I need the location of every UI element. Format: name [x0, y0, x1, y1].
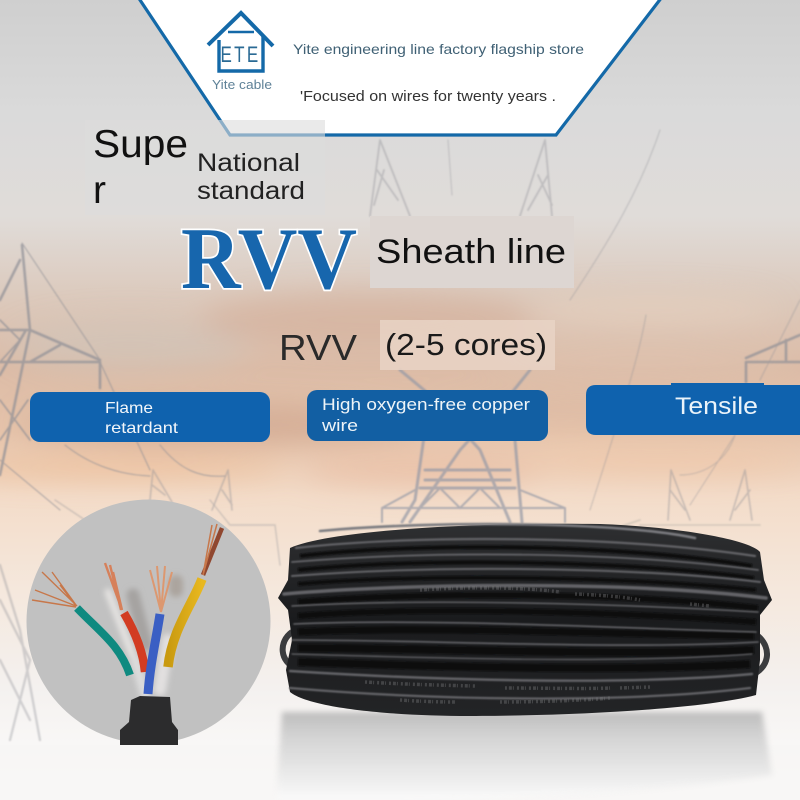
wire: yellow	[168, 579, 202, 667]
heading: Super National standard: Supe	[93, 123, 188, 166]
coil strand shadows	[298, 547, 758, 668]
cable sheath	[120, 696, 178, 745]
heading: Super National standard: National	[197, 149, 300, 177]
coil printed marks	[365, 588, 710, 702]
heading: Sheath line: Sheath line	[376, 233, 566, 271]
wire: blue	[148, 614, 160, 694]
badge: tensile: Tensile	[675, 393, 758, 420]
heading: Sheath line	[370, 216, 574, 288]
subheading: 2-5 cores: (2-5 cores)	[385, 327, 547, 362]
pylon: top centre	[370, 140, 552, 216]
heading: RVV large logo text: RVV	[181, 211, 357, 308]
logo caption: Yite cable	[212, 78, 272, 92]
badge: high oxygen-free copper wire: wire	[321, 416, 358, 435]
pylon: centre behind wire badge	[382, 370, 565, 522]
heading: Super National standard: r	[93, 169, 106, 212]
coil loose loop ends	[283, 632, 767, 676]
heading: Super National standard	[85, 120, 325, 215]
badge: flame retardant: Flame	[105, 400, 153, 417]
slogan: 'Focused on wires for twenty years .	[300, 89, 556, 105]
coil strand highlights	[284, 524, 766, 699]
coil body	[278, 524, 772, 716]
badge: flame retardant: retardant	[105, 420, 179, 437]
coil reflection	[276, 712, 772, 800]
icon: house logo	[208, 13, 273, 71]
photo: stripped five-core cable in circle	[26, 500, 270, 745]
badge: high oxygen-free copper wire: High oxygen-free copper	[322, 395, 530, 414]
badge: high oxygen-free copper wire	[307, 390, 548, 441]
subheading: RVV: RVV	[279, 327, 357, 368]
subheading: 2-5 cores	[380, 320, 555, 370]
heading: Super National standard: standard	[197, 177, 305, 205]
store name: Yite engineering line factory flagship store	[293, 41, 584, 57]
header plate	[138, 0, 662, 135]
power pylons in background	[0, 130, 800, 740]
badge: flame retardant	[30, 392, 270, 442]
wire: teal	[77, 608, 130, 675]
badge: tensile	[586, 383, 800, 435]
pylon: right	[570, 130, 800, 510]
white and grey wire ghosts	[108, 582, 176, 695]
photo: black cable coil	[276, 524, 772, 800]
icon: house logo: ETE	[220, 42, 260, 67]
pylon: lower left	[0, 500, 280, 740]
fade to white at the bottom	[0, 745, 800, 800]
pylons: lower small	[150, 435, 760, 530]
copper strands	[32, 524, 222, 612]
pylon: left	[0, 243, 225, 510]
wire: red	[124, 613, 145, 672]
